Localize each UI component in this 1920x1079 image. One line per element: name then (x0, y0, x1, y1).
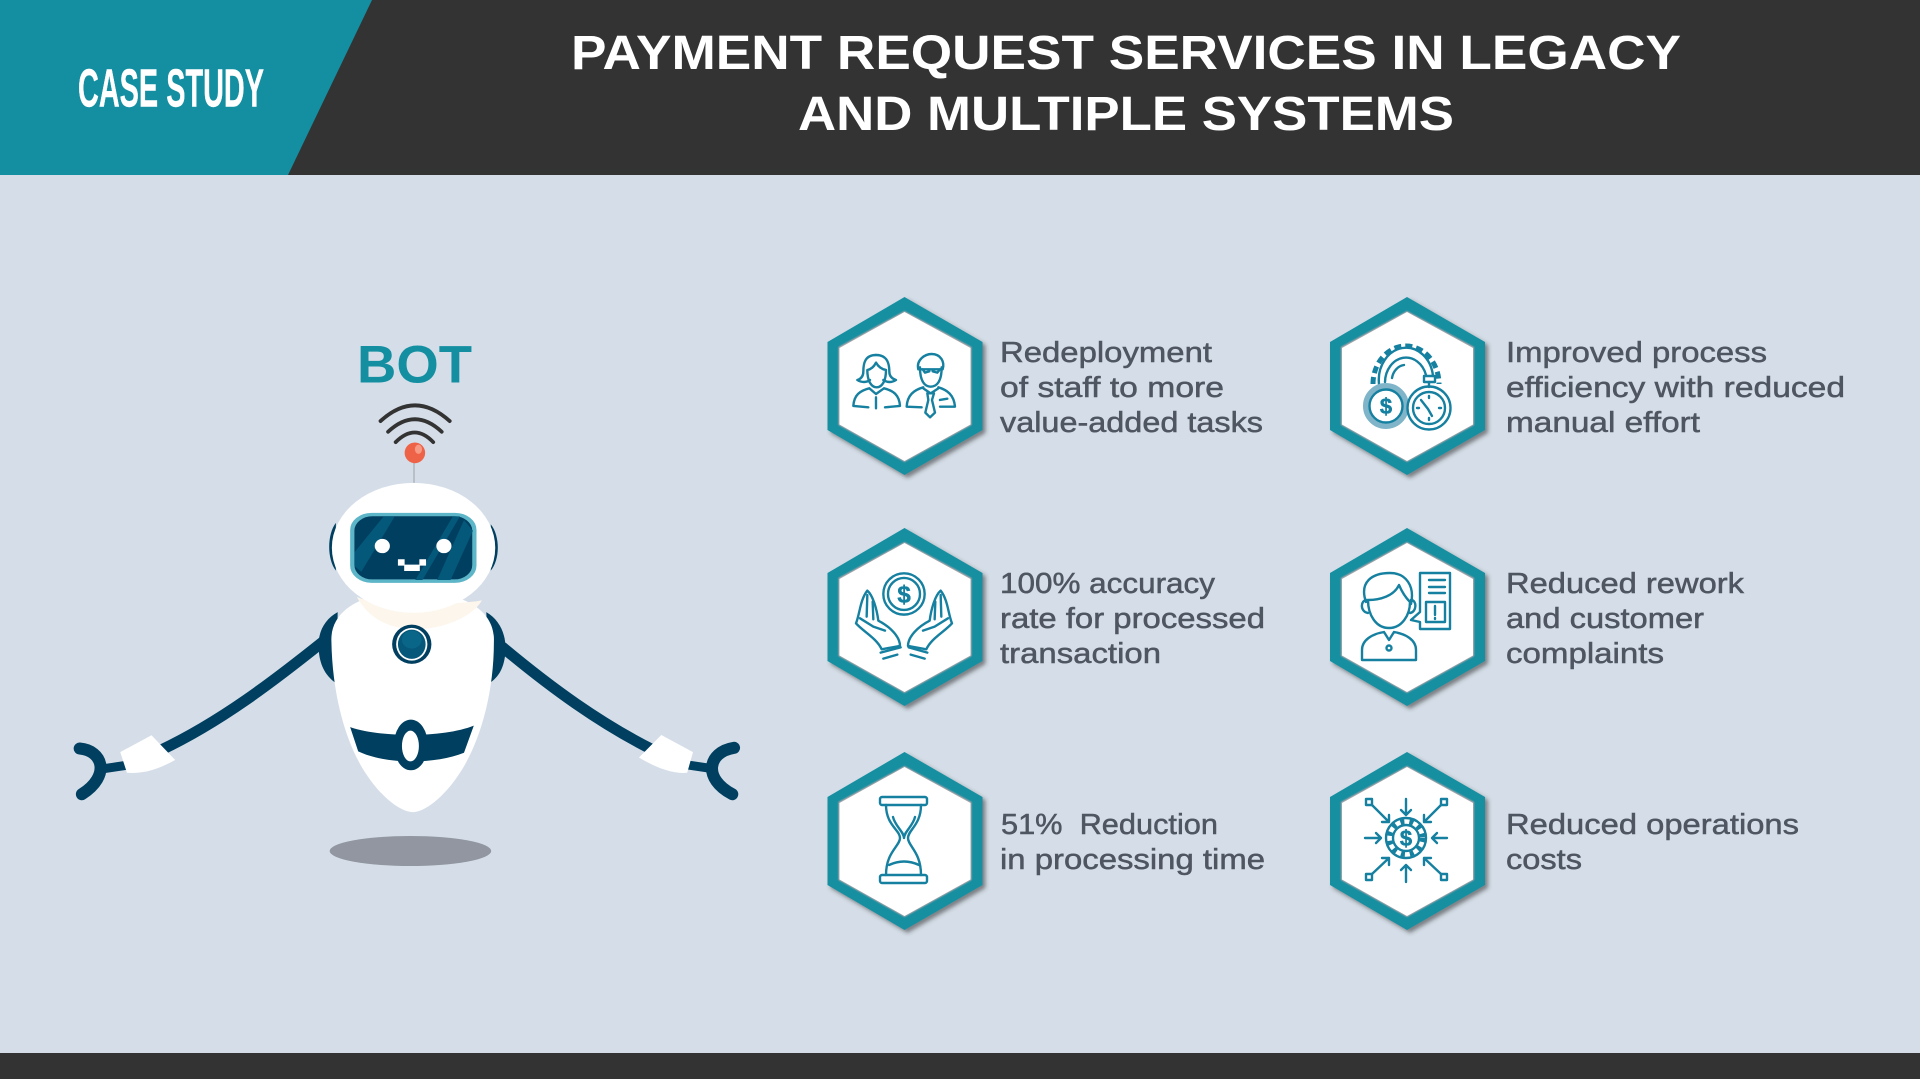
case study tab: CASE STUDY (78, 58, 264, 118)
text: Redeployment (1000, 337, 1212, 369)
antenna (405, 442, 425, 484)
text: 51% Reduction (1001, 809, 1218, 841)
text: Reduced rework (1506, 568, 1745, 600)
hexagon badge (1330, 528, 1485, 706)
text: costs (1506, 844, 1582, 876)
text: value-added tasks (1000, 407, 1263, 439)
text: of staff to more (1000, 372, 1224, 404)
item: accuracy (828, 528, 1265, 706)
hexagon badge (1330, 297, 1485, 475)
icon: hands holding coin (856, 573, 952, 659)
head (332, 483, 495, 613)
icon: gear, coin and stopwatch (1366, 346, 1450, 430)
item: process efficiency (1330, 297, 1845, 475)
text: and customer (1506, 603, 1704, 635)
neck (357, 597, 482, 629)
text: Improved process (1506, 337, 1767, 369)
text: transaction (1000, 638, 1161, 670)
item: operations costs (1330, 752, 1799, 930)
text: rate for processed (1000, 603, 1265, 635)
hexagon badge (828, 528, 982, 706)
icon: hourglass (880, 797, 927, 883)
wifi signal (381, 405, 450, 442)
text: efficiency with reduced (1506, 372, 1845, 404)
footer bar (0, 1053, 1920, 1079)
belt (350, 720, 474, 770)
shoulders (318, 612, 506, 684)
visor (351, 514, 475, 582)
text (1000, 337, 1263, 439)
text (1506, 568, 1745, 670)
BOT heading: BOT (357, 336, 472, 394)
body (331, 591, 494, 812)
text: manual effort (1506, 407, 1700, 439)
case study tab (0, 0, 372, 175)
ears (329, 523, 498, 571)
left arm (80, 641, 323, 794)
text (1000, 809, 1265, 876)
text: in processing time (1000, 844, 1265, 876)
chest button (392, 625, 431, 664)
icon: two staff members (853, 354, 955, 417)
text (1000, 568, 1265, 670)
icon: converging arrows on dollar chip (1365, 799, 1447, 882)
header bar (0, 0, 1920, 175)
right arm (502, 647, 734, 794)
item: processing time (828, 752, 1265, 930)
floor shadow (330, 836, 491, 866)
icon: hands holding coin: $ (897, 582, 911, 609)
item: redeployment (828, 297, 1263, 475)
icon: customer complaint (1362, 573, 1450, 660)
text (1506, 337, 1845, 439)
hexagon badge (828, 752, 982, 930)
hexagon badge (1330, 752, 1485, 930)
robot illustration (80, 405, 734, 866)
text (1506, 809, 1799, 876)
text: 100% accuracy (1000, 568, 1216, 600)
text: Reduced operations (1506, 809, 1799, 841)
icon: converging arrows on dollar chip: $ (1400, 826, 1412, 851)
title: PAYMENT REQUEST SERVICES IN LEGACY (571, 27, 1681, 80)
item: rework (1330, 528, 1745, 706)
text: complaints (1506, 638, 1664, 670)
hexagon badge (828, 297, 982, 475)
title (571, 27, 1681, 141)
title: AND MULTIPLE SYSTEMS (798, 88, 1454, 141)
icon: gear, coin and stopwatch: $ (1380, 394, 1392, 419)
